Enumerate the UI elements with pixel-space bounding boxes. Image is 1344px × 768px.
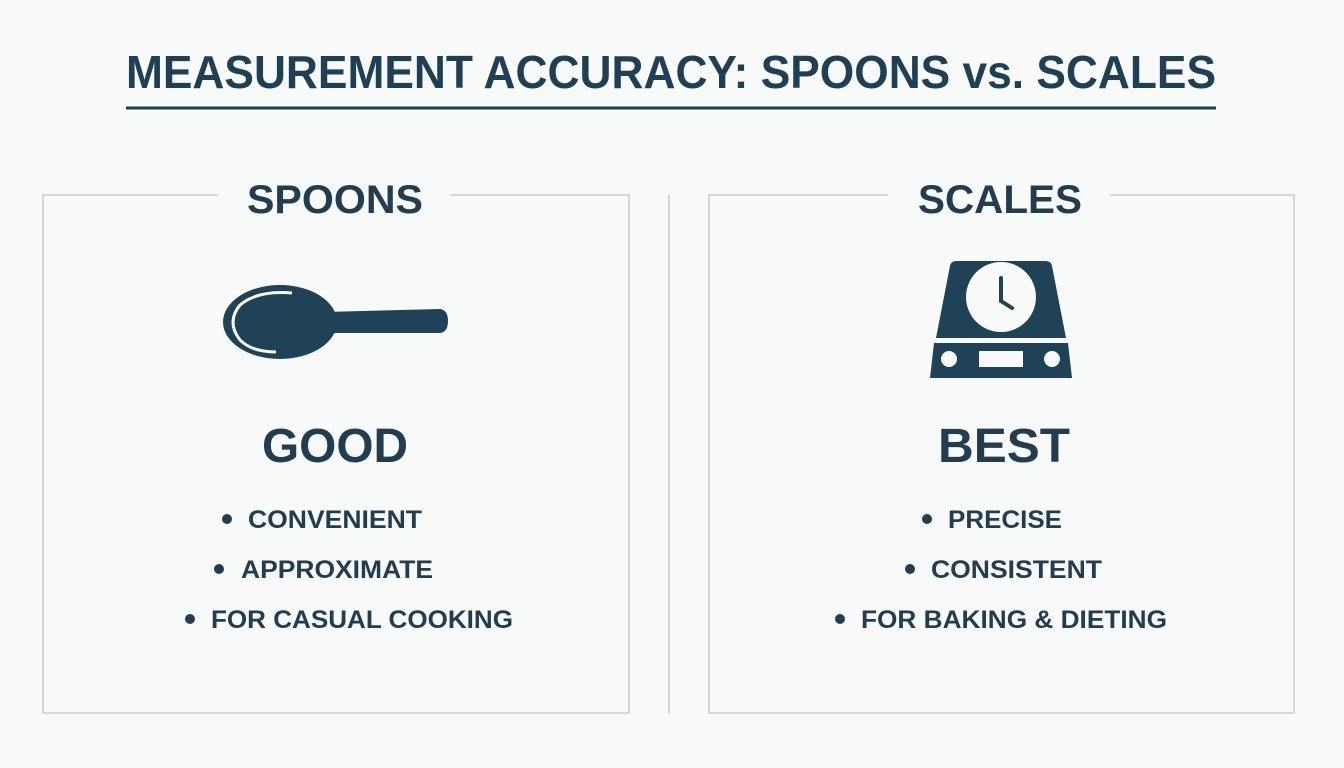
bullet list: scales: PRECISE <box>948 506 1062 534</box>
bullet list: spoons: FOR CASUAL COOKING <box>211 606 513 634</box>
rating: best: BEST <box>938 420 1070 473</box>
icon: spoon <box>223 285 448 359</box>
title: MEASUREMENT ACCURACY: SPOONS vs. SCALES <box>126 46 1216 98</box>
rating: good: GOOD <box>262 420 408 473</box>
heading: scales: SCALES <box>918 178 1082 222</box>
bullet list: scales <box>835 506 1167 634</box>
bullet list: scales: FOR BAKING & DIETING <box>861 606 1167 634</box>
panel: spoons <box>43 178 629 713</box>
panel: scales <box>709 178 1294 713</box>
bullet list: spoons: CONVENIENT <box>248 506 422 534</box>
bullet list: spoons <box>185 506 513 634</box>
bullet list: spoons: APPROXIMATE <box>241 556 433 584</box>
heading: spoons: SPOONS <box>247 178 423 222</box>
icon: kitchen scale <box>930 261 1072 378</box>
bullet list: scales: CONSISTENT <box>931 556 1102 584</box>
